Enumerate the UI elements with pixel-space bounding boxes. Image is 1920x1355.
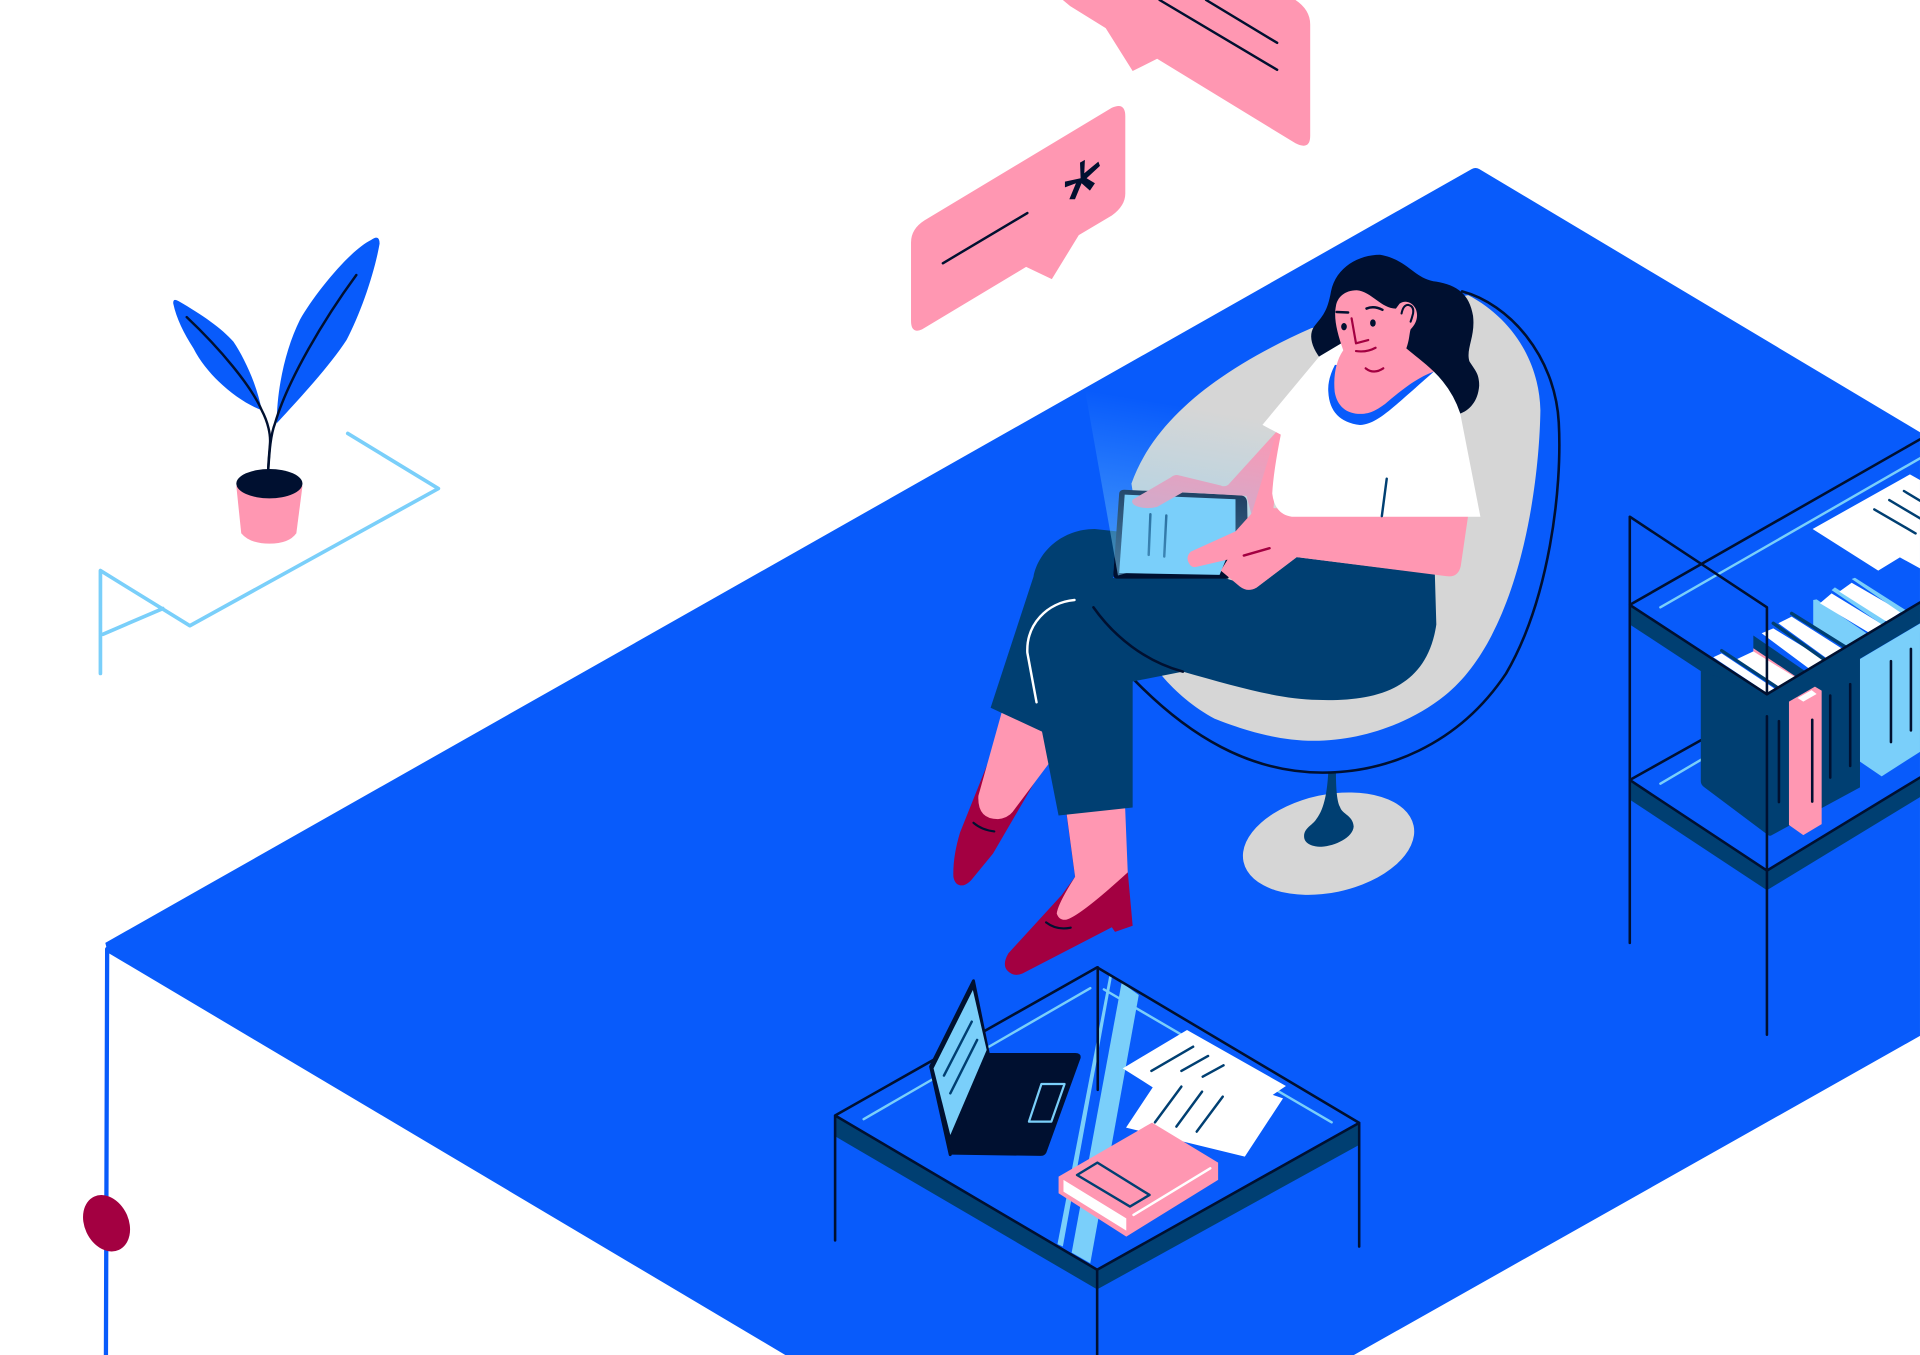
back leg and shoe xyxy=(953,713,1049,885)
papers xyxy=(1123,1030,1286,1157)
red oval marker xyxy=(74,1187,139,1259)
laptop xyxy=(931,981,1081,1156)
front arm and hand xyxy=(1188,431,1468,590)
hair xyxy=(1311,255,1479,414)
woman xyxy=(953,255,1480,975)
dark blue trousers xyxy=(991,529,1436,815)
upper shelf band xyxy=(1630,605,1767,694)
white t-shirt xyxy=(1262,343,1480,517)
lower shelf xyxy=(1630,740,1920,890)
front glass table xyxy=(835,967,1359,1355)
navy book block xyxy=(1701,602,1920,836)
shelf inner line xyxy=(1660,458,1920,607)
book tops xyxy=(1713,578,1906,693)
egg chair xyxy=(1131,291,1559,773)
pink book xyxy=(1059,1123,1218,1237)
pink book on shelf xyxy=(1789,687,1822,835)
face and neck xyxy=(1334,290,1434,414)
speech bubble: asterisk xyxy=(911,106,1125,331)
screen light beam xyxy=(1085,389,1280,576)
shelf paper xyxy=(1813,474,1920,571)
inner cyan lines xyxy=(864,988,1332,1122)
table edge band xyxy=(835,1115,1359,1289)
tablet xyxy=(1113,490,1248,579)
light blue book xyxy=(1860,624,1920,776)
blue collar xyxy=(1328,365,1434,425)
back arm and hand xyxy=(1132,429,1281,514)
table frame and legs xyxy=(835,967,1359,1355)
cyan floor outline xyxy=(100,433,438,673)
shelf frame and posts xyxy=(1630,439,1920,1035)
speech bubble: top xyxy=(1063,0,1310,146)
right bookshelf xyxy=(1630,439,1920,1035)
front leg and shoe xyxy=(1005,806,1133,975)
chair base and stem xyxy=(1233,771,1424,910)
light reflections xyxy=(1057,976,1139,1263)
potted plant xyxy=(173,238,380,544)
